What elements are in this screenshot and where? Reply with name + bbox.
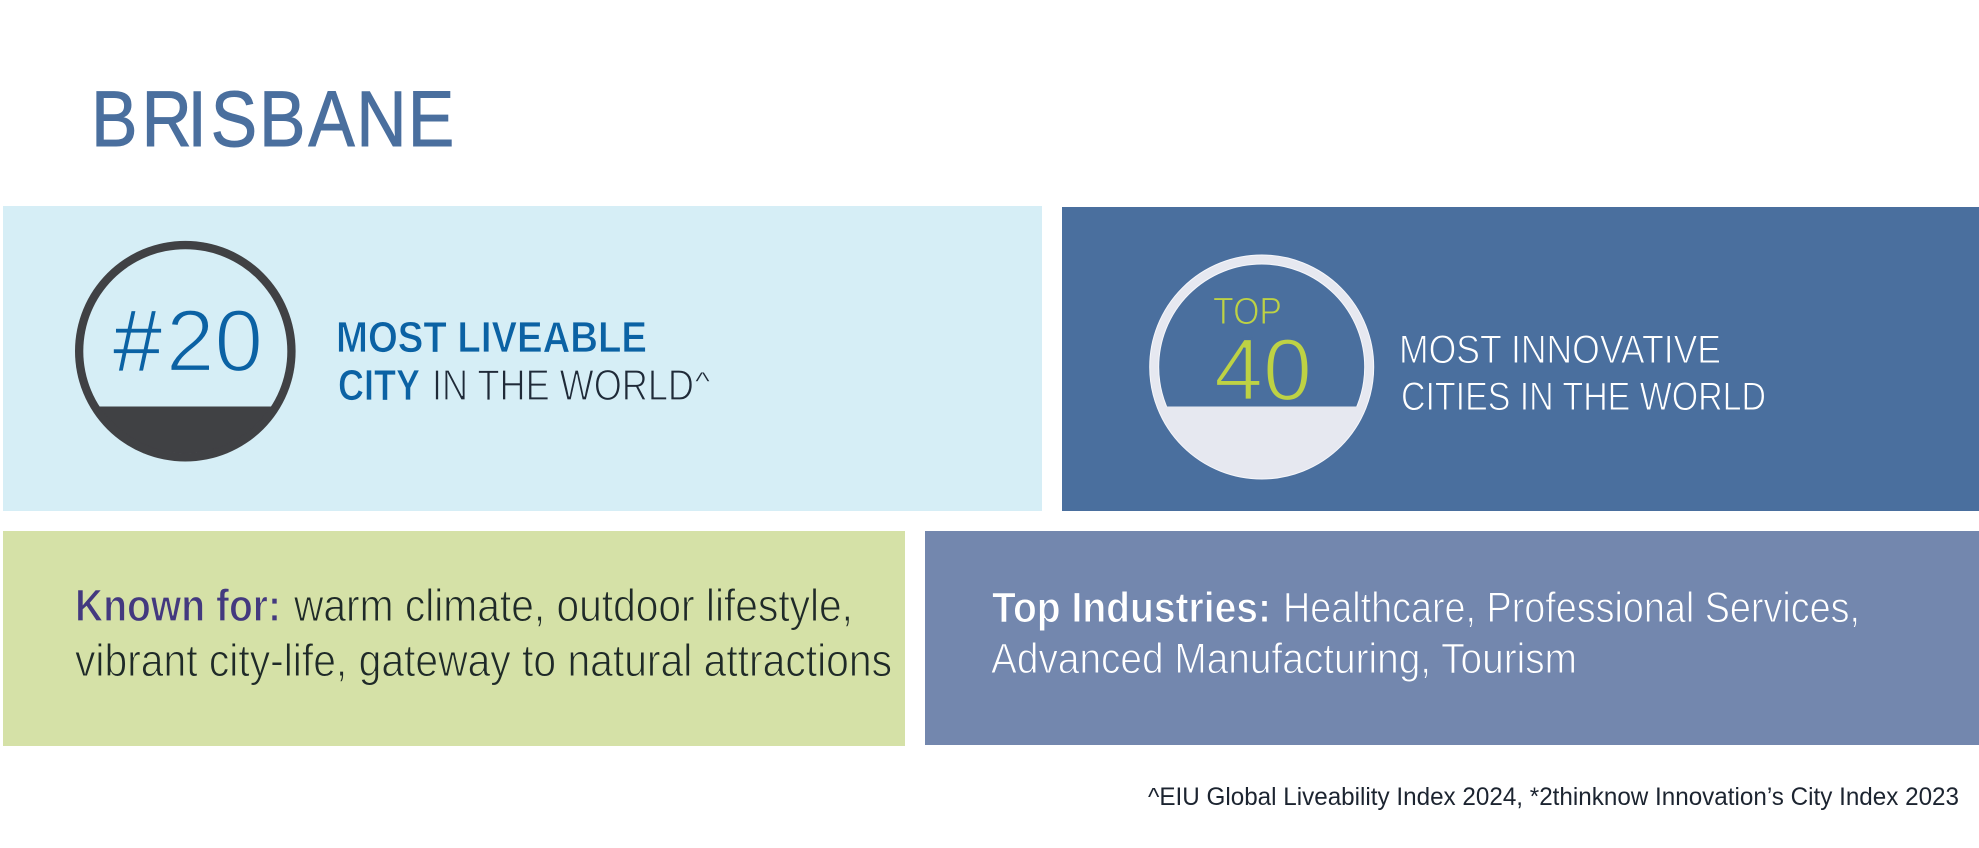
label: cities in the world: CITIES IN THE WORLD (1401, 375, 1766, 419)
top industries line 2: Advanced Manufacturing, Tourism (991, 635, 1577, 683)
rank number: 20 (166, 291, 263, 390)
footnote marker: ^ (695, 366, 711, 396)
panel: most liveable city (3, 206, 1042, 511)
panel background (3, 206, 1042, 511)
rank number (113, 291, 263, 390)
panel: top industries (925, 531, 1979, 745)
panel background (1062, 207, 1979, 511)
panel background (925, 531, 1979, 745)
top industries line 1: Healthcare, Professional Services, (1283, 584, 1860, 632)
known for list line 2: vibrant city-life, gateway to natural attractions (75, 635, 892, 686)
icon: ranking circle (1150, 255, 1374, 479)
top industries heading: Top Industries: (992, 584, 1271, 632)
known for heading: Known for: (75, 580, 281, 631)
footnote sources: ^EIU Global Liveability Index 2024, *2thinknow Innovation’s City Index 2023 (1148, 783, 1959, 811)
known for list line 1: warm climate, outdoor lifestyle, (293, 580, 853, 631)
rank label: top: TOP (1213, 291, 1282, 333)
label: most liveable: MOST LIVEABLE (336, 313, 647, 362)
icon: ranking circle (75, 241, 296, 462)
label: in the world: IN THE WORLD (432, 361, 694, 410)
rank number: # (113, 291, 162, 390)
label: most innovative: MOST INNOVATIVE (1399, 328, 1721, 372)
panel: known for (3, 531, 905, 746)
rank number: 40 (1214, 320, 1312, 419)
panel background (3, 531, 905, 746)
label: city: CITY (338, 361, 420, 410)
panel: most innovative cities (1062, 207, 1979, 511)
title: BRISBANE (91, 75, 454, 163)
